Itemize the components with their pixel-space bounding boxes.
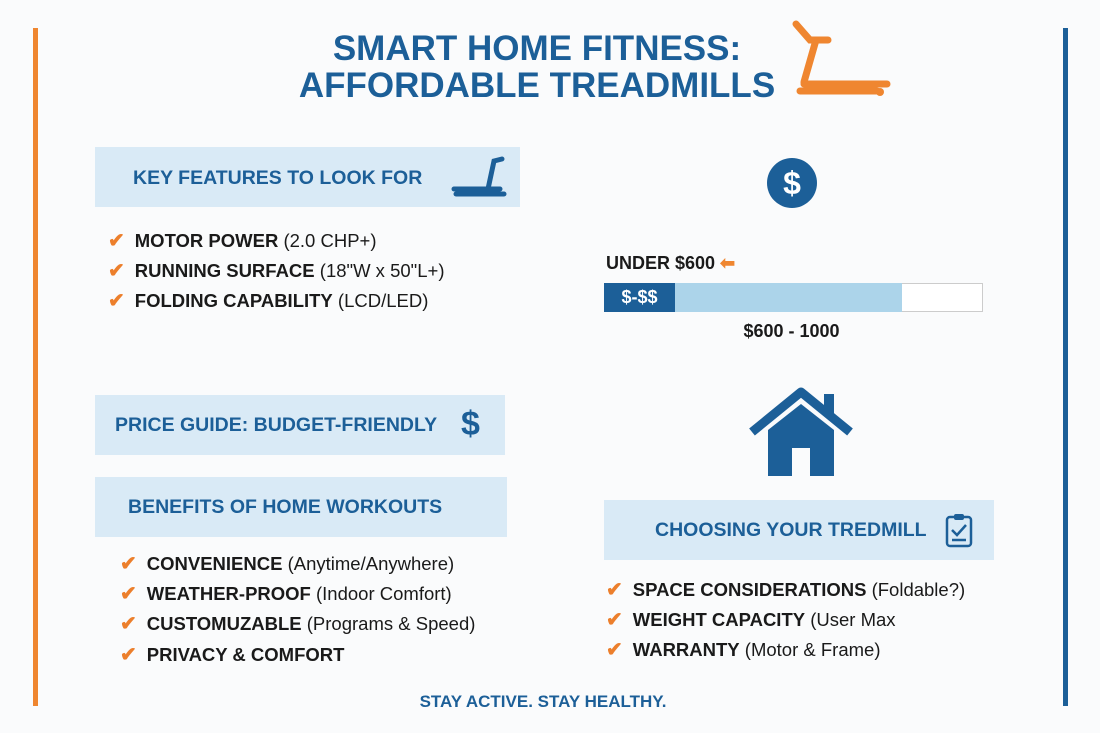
list: benefits: ✔ CONVENIENCE (Anytime/Anywhere) xyxy=(120,553,454,575)
icon: orange treadmill xyxy=(792,20,890,96)
list: choosing: ✔ WEIGHT CAPACITY (User Max xyxy=(606,609,896,631)
panel: choosing header xyxy=(604,500,994,560)
list: choosing: ✔ WARRANTY (Motor & Frame) xyxy=(606,639,880,661)
icon: dollar circle: $ xyxy=(783,165,801,201)
list: benefits xyxy=(120,553,475,666)
title xyxy=(299,29,775,105)
panel: benefits header: BENEFITS OF HOME WORKOUTS xyxy=(128,496,442,518)
list: key features xyxy=(108,230,444,312)
icon: blue treadmill xyxy=(452,156,506,196)
list: key features: ✔ FOLDING CAPABILITY (LCD/LED) xyxy=(108,290,428,312)
panel: choosing header: CHOOSING YOUR TREDMILL xyxy=(655,519,927,541)
icon: house xyxy=(749,388,853,476)
icon: dollar circle xyxy=(767,158,817,208)
price bar chart xyxy=(604,253,983,341)
panel: key features header: KEY FEATURES TO LOOK FOR xyxy=(133,167,422,189)
footer: STAY ACTIVE. STAY HEALTHY. xyxy=(420,692,666,711)
price bar chart: $600 - 1000 xyxy=(743,321,840,341)
panel: key features header xyxy=(95,147,520,207)
list: benefits: ✔ PRIVACY & COMFORT xyxy=(120,644,344,666)
list: benefits: ✔ CUSTOMUZABLE (Programs & Speed) xyxy=(120,613,475,635)
icon: clipboard xyxy=(946,514,972,548)
panel: price guide header: $ xyxy=(461,405,480,443)
title: SMART HOME FITNESS: xyxy=(333,29,741,68)
list: choosing: ✔ SPACE CONSIDERATIONS (Foldable?) xyxy=(606,579,965,601)
title: AFFORDABLE TREADMILLS xyxy=(299,66,775,105)
list: key features: ✔ MOTOR POWER (2.0 CHP+) xyxy=(108,230,376,252)
panel: price guide header xyxy=(95,395,505,455)
list: benefits: ✔ WEATHER-PROOF (Indoor Comfort) xyxy=(120,583,452,605)
price bar chart: $-$$ xyxy=(621,287,658,307)
panel: price guide header: PRICE GUIDE: BUDGET-FRIENDLY xyxy=(115,414,437,436)
list: key features: ✔ RUNNING SURFACE (18"W x 50"L+) xyxy=(108,260,444,282)
list: choosing xyxy=(606,579,965,661)
price bar chart: UNDER $600 ⬅ xyxy=(606,253,735,273)
panel: benefits header xyxy=(95,477,507,537)
